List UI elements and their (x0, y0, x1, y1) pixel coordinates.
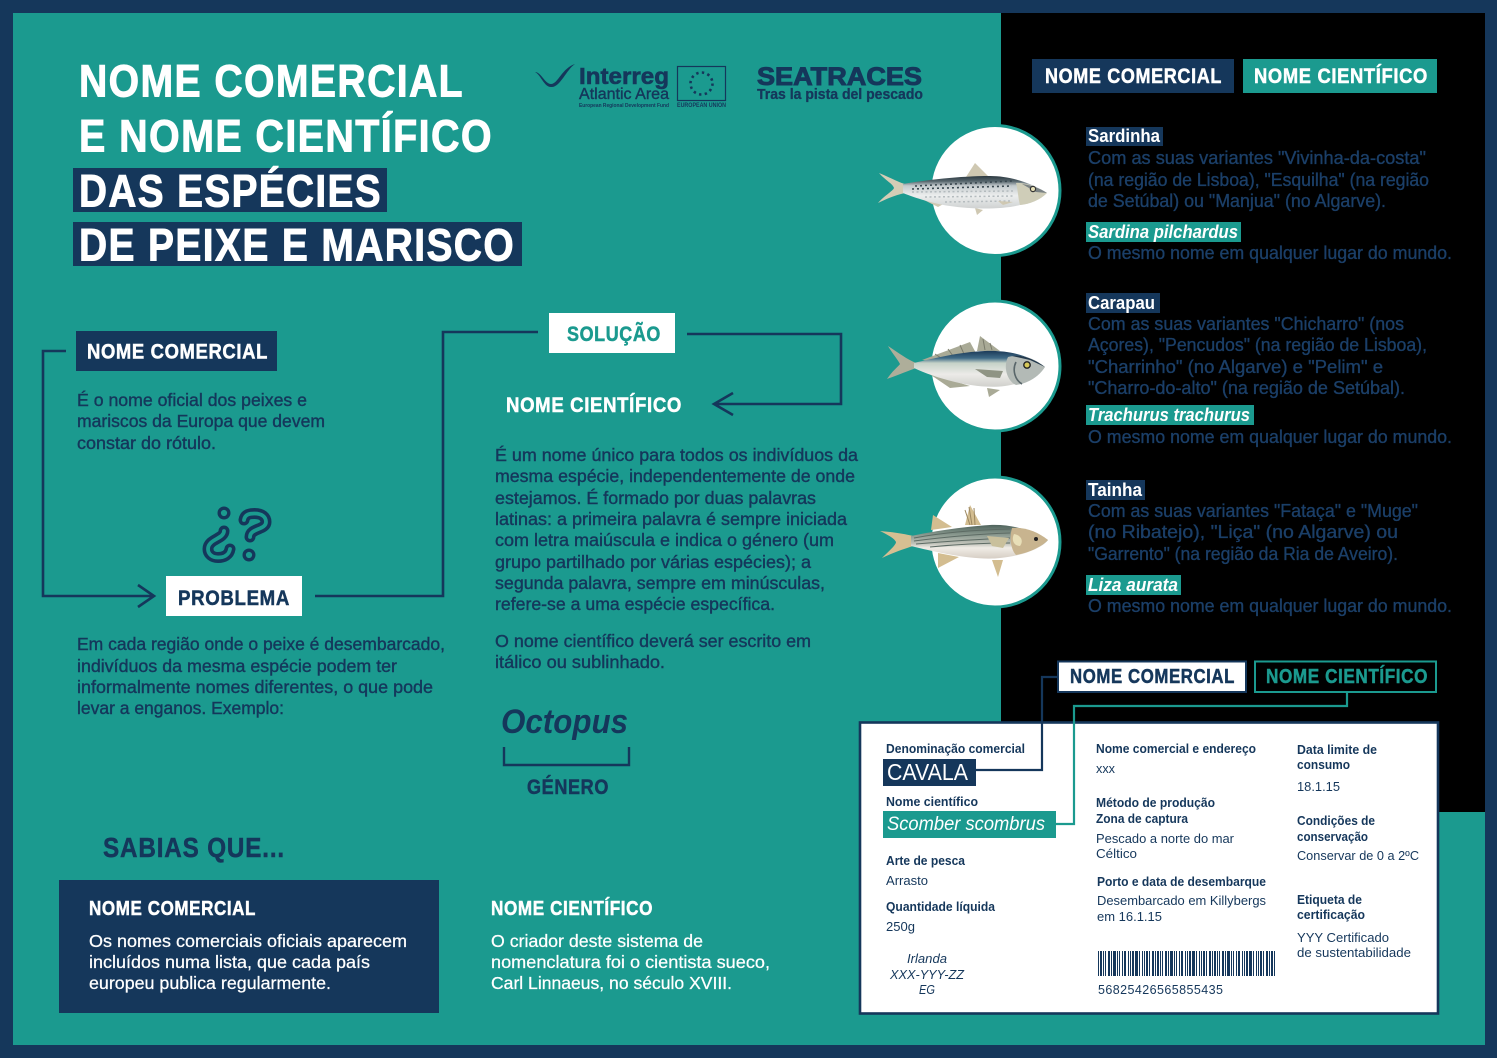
label column 2: Desembarcado em Killybergs (1097, 894, 1266, 908)
panel: sabias que nome comercial: europeu publica regularmente. (89, 973, 331, 993)
species: carapau: Com as suas variantes "Chicharro" (nos (1088, 314, 1404, 334)
label column 2: xxx (1096, 762, 1116, 776)
callout box: nome comercial: NOME COMERCIAL (1070, 666, 1235, 688)
text: problema description: Em cada região onde o peixe é desembarcado, (77, 634, 445, 654)
text: nome científico description: grupo partilhado por várias espécies); a (495, 552, 811, 572)
text: nome científico description: latinas: a primeira palavra é sempre iniciada (495, 509, 847, 529)
text: problema description: informalmente nomes diferentes, o que pode (77, 677, 433, 697)
logo: Interreg Atlantic Area: Atlantic Area (579, 86, 669, 103)
species: carapau: "Charrinho" (no Algarve) e "Pelim" e (1088, 357, 1383, 377)
label column 3: YYY Certificado (1297, 931, 1389, 945)
text: problema description (77, 634, 445, 718)
text: problema description: levar a enganos. Exemplo: (77, 698, 284, 718)
panel: product label (860, 722, 1438, 1014)
arrow: problema to solução (315, 332, 538, 596)
label column 3: conservação (1297, 830, 1368, 844)
panel: sabias que nome científico: Carl Linnaeus, no século XVIII. (491, 973, 732, 993)
label column 2: Método de produção (1096, 796, 1215, 810)
label column 3: de sustentabilidade (1297, 946, 1411, 960)
fish illustration: sardinha (878, 163, 1047, 215)
species: sardinha: O mesmo nome em qualquer lugar do mundo. (1088, 243, 1452, 263)
callout box: nome comercial (1058, 662, 1246, 692)
label column 3: Etiqueta de (1297, 893, 1362, 907)
label column 3: Conservar de 0 a 2ºC (1297, 849, 1419, 863)
panel: nome comercial definition: É o nome oficial dos peixes e (77, 390, 307, 410)
heading: nome científico: NOME CIENTÍFICO (506, 394, 682, 417)
species: tainha: "Garrento" (na região da Ria de Aveiro). (1088, 544, 1398, 564)
title (73, 56, 522, 270)
panel: nome comercial definition: constar do rótulo. (77, 433, 216, 453)
logo: Interreg Atlantic Area: Interreg (579, 63, 669, 89)
label column 1: XXX-YYY-ZZ (889, 968, 964, 982)
species: tainha (1086, 480, 1452, 616)
species: carapau (1086, 293, 1452, 447)
fish illustration: carapau (887, 336, 1045, 397)
logo: Seatraces: SEATRACES (757, 63, 922, 91)
species: tainha: (no Ribatejo), "Liça" (no Algarve) ou (1088, 522, 1398, 542)
label column 1: Scomber scombrus (887, 814, 1045, 835)
title: NOME COMERCIAL (79, 56, 464, 106)
text: nome científico description: itálico ou sublinhado. (495, 652, 665, 672)
species: tainha: O mesmo nome em qualquer lugar do mundo. (1088, 596, 1452, 616)
label column 3: 18.1.15 (1297, 780, 1340, 794)
species: sardinha: Sardinha (1088, 126, 1161, 146)
callout box: nome científico: NOME CIENTÍFICO (1266, 665, 1428, 688)
species: sardinha: Sardina pilchardus (1088, 222, 1238, 242)
label: solução (549, 313, 675, 353)
heading: sabias que: SABIAS QUE... (103, 832, 285, 863)
label column 1 (883, 742, 1056, 997)
label column 2: em 16.1.15 (1097, 910, 1162, 924)
label column 2: Porto e data de desembarque (1097, 875, 1266, 889)
label: problema: PROBLEMA (178, 587, 290, 610)
text: nome científico description (495, 445, 858, 672)
label column 1: Quantidade líquida (886, 900, 996, 914)
fish circle: sardinha (930, 126, 1060, 256)
species: tainha: Liza aurata (1088, 575, 1178, 595)
logo: Interreg Atlantic Area: European Regional Development Fund (579, 103, 669, 109)
arrow: nome comercial to problema (43, 351, 154, 607)
fish circle: carapau (930, 301, 1060, 431)
panel: nome comercial definition: NOME COMERCIAL (87, 340, 268, 364)
label column 3 (1297, 743, 1419, 960)
callout line: nome científico to scomber scombrus (1056, 692, 1347, 824)
species: carapau: "Charro-do-alto" (na região de Setúbal). (1088, 378, 1405, 398)
panel: sabias que nome científico: O criador deste sistema de (491, 931, 703, 951)
logo: European Union flag (677, 66, 726, 109)
icon: question marks (208, 508, 266, 560)
logo: Interreg Atlantic Area (535, 63, 669, 109)
callout box: nome científico (1255, 662, 1436, 692)
legend: nome científico header (1243, 59, 1437, 93)
logo: Seatraces (757, 63, 923, 103)
black right panel (1001, 13, 1485, 812)
label column 2: Pescado a norte do mar (1096, 832, 1234, 846)
arrow: solução to nome científico (687, 334, 841, 415)
label column 1: Irlanda (907, 952, 947, 966)
text: nome científico description: refere-se a uma espécie específica. (495, 594, 775, 614)
species: sardinha: Com as suas variantes "Vivinha-da-costa" (1088, 148, 1426, 168)
label column 2: Céltico (1096, 847, 1137, 861)
panel: nome comercial definition: mariscos da Europa que devem (77, 411, 325, 431)
example: octopus género (501, 703, 629, 799)
example: octopus género: GÉNERO (527, 776, 609, 799)
text: nome científico description: com letra maiúscula e indica o género (um (495, 530, 834, 550)
text: nome científico description: estejamos. É formado por duas palavras (495, 488, 816, 508)
text: nome científico description: O nome científico deverá ser escrito em (495, 631, 811, 651)
fish illustration: tainha (880, 505, 1048, 577)
barcode: 56825426565855435 (1098, 983, 1223, 997)
label column 1: Arte de pesca (886, 854, 966, 868)
text: problema description: indivíduos da mesma espécie podem ter (77, 656, 397, 676)
label column 2: Nome comercial e endereço (1096, 742, 1256, 756)
label column 1: Denominação comercial (886, 742, 1025, 756)
logo: Seatraces: Tras la pista del pescado (757, 87, 923, 103)
panel: sabias que nome comercial: Os nomes comerciais oficiais aparecem (89, 931, 407, 951)
species: carapau: O mesmo nome em qualquer lugar do mundo. (1088, 427, 1452, 447)
label: problema (166, 576, 302, 616)
species: carapau: Trachurus trachurus (1088, 405, 1250, 425)
label column 3: Data limite de (1297, 743, 1377, 757)
label column 1: Nome científico (886, 795, 978, 809)
species: tainha: Com as suas variantes "Fataça" e "Muge" (1088, 501, 1418, 521)
fish circle: tainha (930, 477, 1060, 607)
label column 1: EG (919, 983, 935, 997)
species: sardinha: (na região de Lisboa), "Esquilha" (na região (1088, 170, 1429, 190)
panel: sabias que nome comercial: incluídos numa lista, que cada país (89, 952, 370, 972)
panel: sabias que nome comercial: NOME COMERCIAL (89, 898, 256, 920)
label column 1: 250g (886, 920, 915, 934)
text: nome científico description: mesma espécie, independentemente de onde (495, 466, 855, 486)
label column 1: Arrasto (886, 874, 928, 888)
label column 3: consumo (1297, 758, 1350, 772)
panel: nome comercial definition (76, 331, 325, 453)
species: carapau: Açores), "Pencudos" (na região de Lisboa), (1088, 335, 1427, 355)
text: nome científico description: segunda palavra, sempre em minúsculas, (495, 573, 825, 593)
callout line: nome comercial to cavala (976, 677, 1058, 770)
label column 1: CAVALA (887, 759, 969, 785)
legend: nome científico header: NOME CIENTÍFICO (1254, 65, 1428, 88)
title: DAS ESPÉCIES (79, 166, 382, 216)
title: DE PEIXE E MARISCO (79, 220, 515, 270)
legend: nome comercial header (1032, 59, 1234, 93)
legend: nome comercial header: NOME COMERCIAL (1045, 65, 1222, 88)
label: solução: SOLUÇÃO (567, 323, 661, 346)
panel: sabias que nome científico: NOME CIENTÍFICO (491, 897, 653, 920)
title: E NOME CIENTÍFICO (79, 110, 493, 162)
panel: sabias que nome comercial (59, 880, 439, 1013)
species: tainha: Tainha (1088, 480, 1143, 500)
panel: sabias que nome científico: nomenclatura foi o cientista sueco, (491, 952, 770, 972)
logo: European Union flag: EUROPEAN UNION (677, 103, 726, 109)
species: sardinha: de Setúbal) ou "Manjua" (no Algarve). (1088, 191, 1386, 211)
panel: sabias que nome científico (491, 897, 770, 993)
species: carapau: Carapau (1088, 293, 1155, 313)
text: nome científico description: É um nome único para todos os indivíduos da (495, 445, 858, 465)
label column 3: certificação (1297, 908, 1365, 922)
species: sardinha (1086, 126, 1452, 263)
label column 3: Condições de (1297, 814, 1375, 828)
example: octopus género: Octopus (501, 703, 628, 741)
label column 2: Zona de captura (1096, 812, 1189, 826)
label column 2 (1096, 742, 1266, 924)
